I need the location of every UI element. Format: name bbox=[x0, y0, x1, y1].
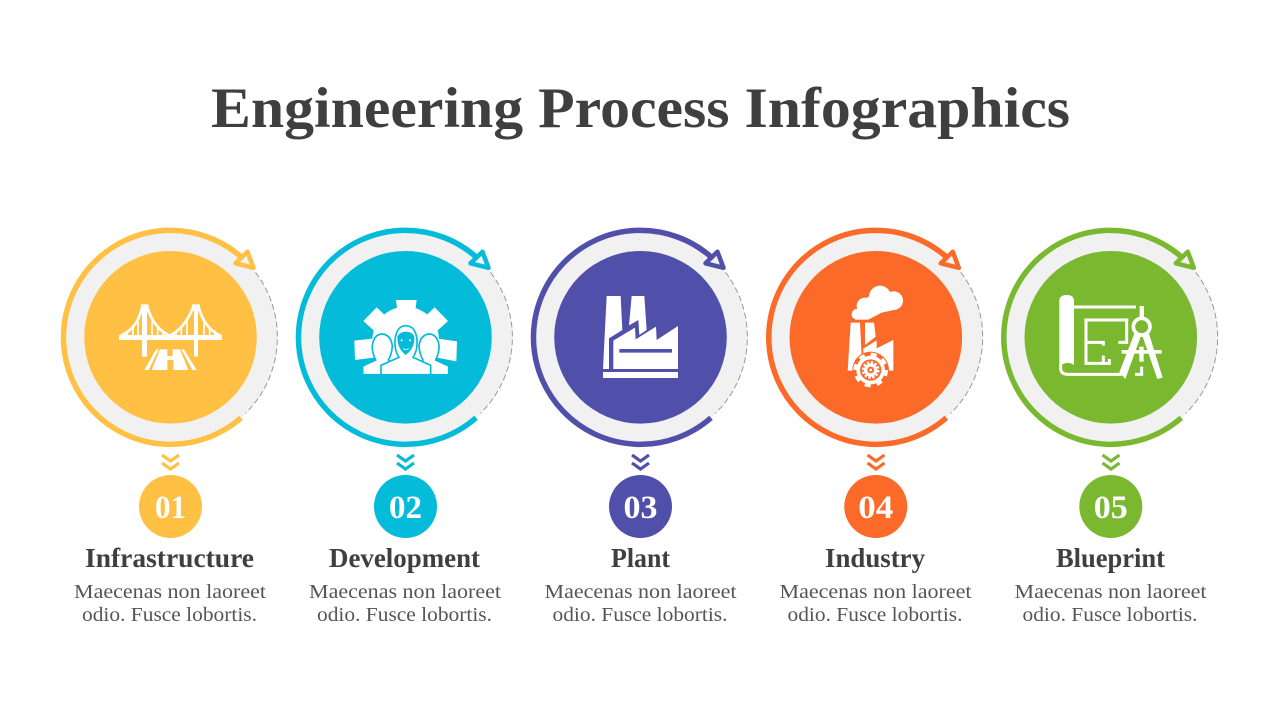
number badge 02: 02 bbox=[389, 490, 422, 526]
number badge 01: 01 bbox=[155, 490, 186, 526]
icon: industry with cloud and gear bbox=[848, 286, 903, 388]
arrow: chevrons 5 bbox=[1102, 455, 1120, 469]
heading: Development: Development bbox=[329, 543, 480, 573]
text block 3 bbox=[544, 581, 737, 626]
arrow: chevrons 2 bbox=[397, 455, 414, 469]
text block 4: odio. Fusce lobortis. bbox=[788, 604, 962, 626]
text block 3: Maecenas non laoreet bbox=[544, 581, 737, 603]
title: Engineering Process Infographics bbox=[211, 77, 1070, 140]
heading: Blueprint: Blueprint bbox=[1056, 543, 1165, 573]
text block 5: Maecenas non laoreet bbox=[1014, 581, 1207, 603]
icon: bridge bbox=[119, 304, 222, 370]
number badge 01 bbox=[139, 475, 202, 538]
heading: Industry: Industry bbox=[825, 543, 925, 573]
arrow: chevrons 1 bbox=[162, 455, 179, 469]
progress ring 3 bbox=[533, 230, 748, 444]
text block 4: Maecenas non laoreet bbox=[780, 581, 972, 603]
number badge 02 bbox=[374, 475, 437, 538]
text block 5: odio. Fusce lobortis. bbox=[1022, 604, 1198, 626]
number badge 04 bbox=[844, 475, 907, 538]
heading: Plant: Plant bbox=[611, 543, 670, 573]
icon: factory bbox=[603, 296, 678, 378]
arrow: chevrons 3 bbox=[632, 455, 649, 469]
heading: Infrastructure: Infrastructure bbox=[85, 543, 254, 573]
number badge 05 bbox=[1079, 475, 1142, 538]
text block 2: Maecenas non laoreet bbox=[309, 581, 501, 603]
text block 4 bbox=[780, 581, 972, 626]
progress ring 4 bbox=[769, 230, 983, 444]
panel: step 5 blueprint bbox=[1004, 230, 1218, 626]
panel: step 1 infrastructure bbox=[63, 230, 278, 626]
text block 1 bbox=[74, 581, 266, 626]
progress ring 2 bbox=[298, 230, 512, 444]
text block 1: Maecenas non laoreet bbox=[74, 581, 266, 603]
number badge 03: 03 bbox=[624, 490, 658, 526]
text block 2 bbox=[309, 581, 501, 626]
number badge 05: 05 bbox=[1094, 490, 1128, 526]
panel: step 4 industry bbox=[769, 230, 983, 626]
progress ring 1 bbox=[63, 230, 278, 444]
number badge 04: 04 bbox=[858, 490, 893, 526]
text block 2: odio. Fusce lobortis. bbox=[317, 604, 492, 626]
icon: blueprint and compass bbox=[1059, 295, 1163, 379]
text block 3: odio. Fusce lobortis. bbox=[552, 604, 728, 626]
panel: step 3 plant bbox=[533, 230, 748, 626]
panel: step 2 development bbox=[298, 230, 512, 626]
progress ring 5 bbox=[1004, 230, 1218, 444]
number badge 03 bbox=[609, 475, 672, 538]
arrow: chevrons 4 bbox=[868, 455, 884, 469]
text block 1: odio. Fusce lobortis. bbox=[82, 604, 257, 626]
icon: team in gear bbox=[354, 300, 457, 375]
text block 5 bbox=[1014, 581, 1207, 626]
